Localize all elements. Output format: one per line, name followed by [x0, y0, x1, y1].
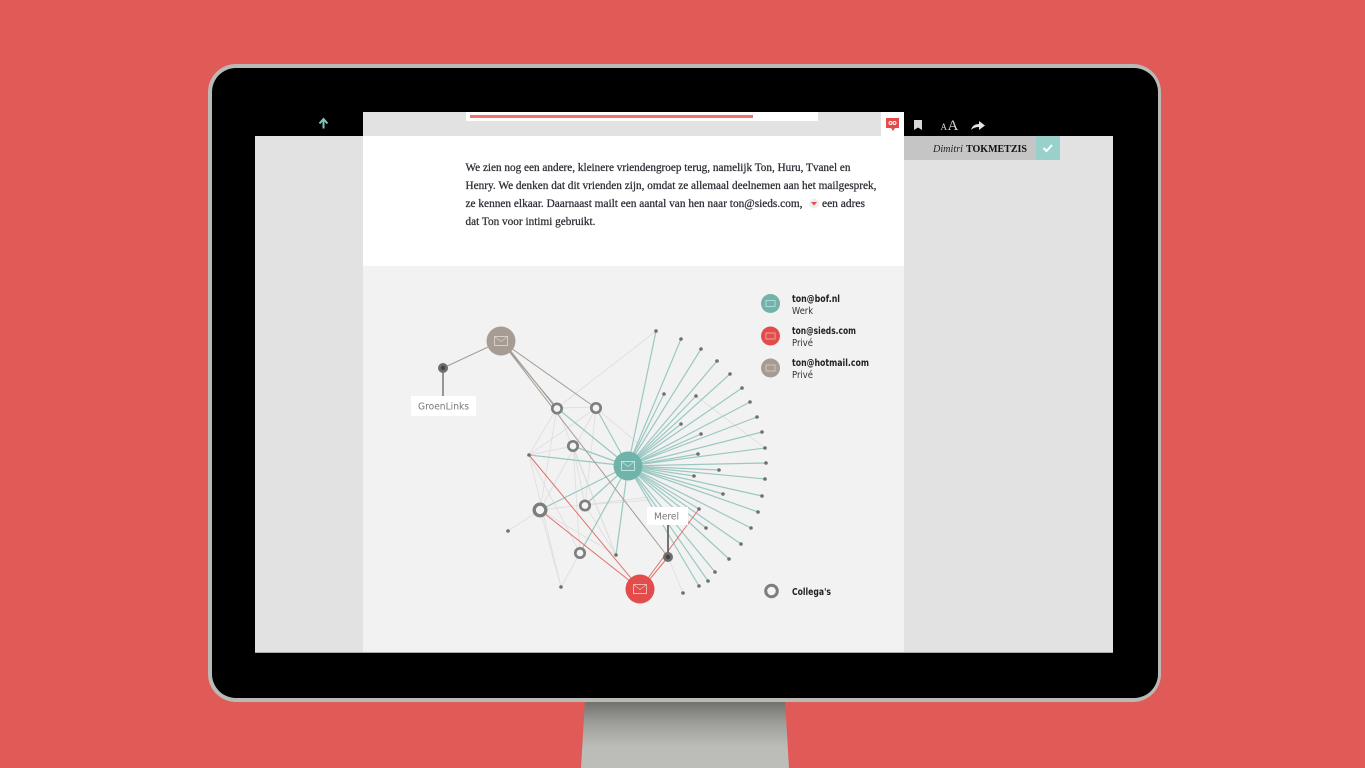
red links — [529, 455, 699, 589]
article text panel — [363, 136, 904, 266]
legend: Collega's — [766, 585, 831, 598]
monitor stand — [581, 700, 789, 768]
node: ton@sieds.com — [626, 574, 654, 604]
author bar: Dimitri — [932, 144, 963, 155]
author bar: TOKMETZIS — [966, 144, 1027, 155]
label: GroenLinks: GroenLinks — [418, 402, 469, 412]
article text: een adres — [822, 198, 866, 210]
legend: ton@sieds.com — [761, 326, 856, 349]
legend: Collega's: Collega's — [792, 587, 831, 598]
legend: ton@hotmail.com: Privé — [792, 370, 813, 381]
legend: ton@bof.nl — [761, 294, 840, 317]
colleague ring nodes — [534, 403, 601, 558]
label: Merel: Merel — [654, 512, 679, 522]
screen side background — [255, 136, 1113, 653]
article text — [466, 162, 877, 228]
article text: Henry. We denken dat dit vrienden zijn, omdat ze allemaal deelnemen aan het mailgesprek, — [466, 180, 877, 192]
legend: ton@bof.nl: ton@bof.nl — [792, 294, 840, 305]
icon: font size: A — [948, 118, 958, 134]
legend: ton@bof.nl: Werk — [792, 306, 813, 317]
outer contact dots — [506, 329, 768, 595]
network chart — [411, 326, 768, 604]
article top bar — [363, 112, 904, 136]
node: ton@bof.nl — [614, 452, 642, 480]
comment button — [881, 112, 904, 136]
icon: bookmark — [914, 120, 922, 130]
article text: We zien nog een andere, kleinere vriendengroep terug, namelijk Ton, Huru, Tvanel en — [466, 162, 851, 174]
brown links — [443, 341, 668, 557]
teal links — [529, 331, 766, 586]
icon: font size — [940, 118, 958, 134]
icon: footnote marker — [809, 198, 819, 208]
legend: ton@hotmail.com: ton@hotmail.com — [792, 358, 869, 369]
legend: ton@hotmail.com — [761, 358, 869, 381]
chart panel — [363, 266, 904, 652]
icon: back to top arrow — [320, 119, 328, 128]
grey links — [508, 331, 765, 593]
legend: ton@sieds.com: Privé — [792, 338, 813, 349]
monitor frame — [208, 64, 1161, 702]
node: ton@hotmail.com — [486, 326, 516, 356]
article text: ze kennen elkaar. Daarnaast mailt een aantal van hen naar ton@sieds.com, — [466, 198, 803, 210]
author bar — [904, 136, 1060, 160]
label: GroenLinks — [411, 363, 476, 416]
article text: dat Ton voor intimi gebruikt. — [466, 216, 596, 228]
icon: font size: A — [940, 122, 948, 132]
label: Merel — [647, 507, 688, 562]
icon: share arrow — [971, 121, 985, 130]
legend: ton@sieds.com: ton@sieds.com — [792, 326, 856, 337]
screen bottom edge — [255, 652, 1113, 653]
